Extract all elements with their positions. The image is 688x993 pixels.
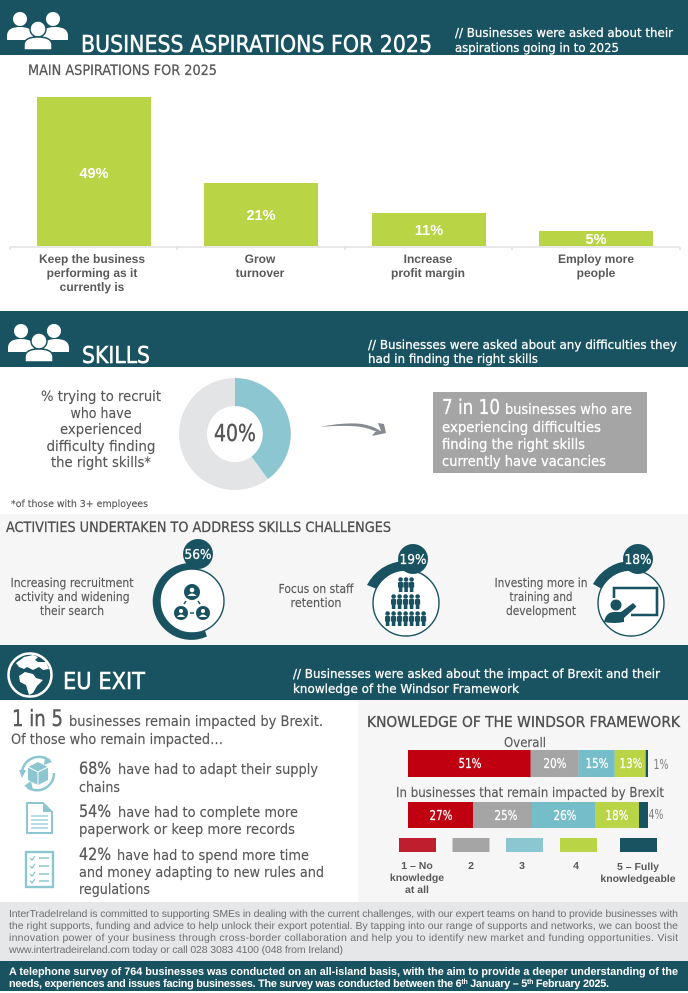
panel: EU exit header (0, 645, 688, 700)
panel: survey method: th (527, 979, 533, 986)
activity: retention 19% (278, 544, 439, 636)
bar chart: main aspirations: Grow (245, 252, 276, 266)
legend: 4 (573, 860, 579, 872)
legend: 5 – Fully (617, 861, 659, 873)
text: recruiting difficulty: % trying to recruit (41, 389, 161, 405)
icon: globe (8, 654, 52, 696)
bar chart: main aspirations: currently is (60, 280, 125, 294)
bar chart: main aspirations: 49% (79, 166, 109, 182)
stacked bar: overall: 20% (544, 757, 566, 772)
panel: business aspirations header (0, 0, 688, 58)
text: 68%: have had to adapt their supply (118, 762, 318, 778)
panel: about InterTradeIreland: InterTradeIreland is committed to supporting SMEs in dealing with the current challenges, with our expert teams on hand to provide businesses with (9, 908, 678, 920)
panel: survey method: A telephone survey of 764 businesses was conducted on an all-island basis, with the aim to provide a deeper understanding of the (9, 966, 678, 978)
text: 54% (79, 802, 298, 838)
text: 42%: have had to spend more time (117, 848, 309, 864)
activity: retention 19%: Focus on staff (278, 582, 354, 596)
legend: 1 – No (401, 860, 433, 872)
icon: document (27, 803, 52, 833)
legend: knowledge (390, 872, 444, 884)
text: recruiting difficulty: who have (70, 406, 132, 422)
icon: checklist (26, 852, 53, 887)
header note: aspirations going in to 2025 (455, 40, 619, 55)
bar chart: main aspirations (10, 97, 680, 294)
panel: Windsor Framework knowledge (358, 700, 688, 902)
panel: survey method: January – 5 (468, 978, 527, 990)
text: 42% (79, 845, 324, 898)
icon: people group (7, 12, 68, 50)
panel: about InterTradeIreland: www.intertradeireland.com today or call 028 3083 4100 (048 from Ireland) (8, 944, 343, 956)
bar chart: main aspirations: Keep the business (39, 252, 145, 266)
icon: pyramid of staff (385, 577, 426, 626)
bar chart: main aspirations: profit margin (391, 266, 465, 280)
callout: 7 in 10: experiencing difficulties (442, 420, 601, 436)
callout: 7 in 10: 7 in 10 (442, 395, 500, 419)
text: 54%: paperwork or keep more records (79, 822, 295, 838)
text: 42%: and money adapting to new rules and (79, 865, 324, 881)
bar chart: main aspirations: 11% (415, 223, 443, 239)
callout: 7 in 10: businesses who are (505, 402, 632, 418)
bar chart: main aspirations: Increase (404, 252, 453, 266)
activity: training 18%: Investing more in (494, 576, 588, 590)
text: 42%: 42% (79, 845, 111, 865)
panel: survey method: needs, experiences and issues facing businesses. The survey was conducted between the 6 (9, 978, 462, 990)
section title: SKILLS (82, 343, 150, 369)
icon: people group (8, 324, 69, 362)
legend: knowledgeable (600, 873, 676, 885)
donut chart: 40% (193, 378, 291, 479)
stacked bar: overall (408, 750, 668, 777)
section title: EU EXIT (63, 669, 146, 695)
legend (390, 838, 676, 896)
header note (455, 25, 674, 55)
activity: recruitment 56%: Increasing recruitment (10, 576, 134, 590)
panel: about InterTradeIreland: innovation power of your business through cross-border collaboration and help you to identify new market and funding opportunities. Visit (9, 932, 678, 944)
callout: 7 in 10: currently have vacancies (442, 454, 606, 470)
icon: network of people (174, 584, 210, 620)
activity: training 18%: training and (510, 590, 572, 604)
bar chart: main aspirations: performing as it (47, 266, 137, 280)
panel: about InterTradeIreland: the right supports, funding and advice to help unlock their export potential. By tapping into our range of supports and networks, we can boost the (9, 920, 678, 932)
bar chart: main aspirations: people (577, 266, 616, 280)
label: overall: Overall (504, 736, 546, 751)
text: 54%: 54% (79, 802, 111, 822)
text: 42%: regulations (79, 882, 150, 898)
legend: 3 (519, 860, 525, 872)
activity: retention 19%: 19% (400, 553, 426, 568)
text: 1 in 5: businesses remain impacted by Brexit. (69, 714, 323, 730)
header note: had in finding the right skills (368, 351, 538, 366)
icon: supply chain box (19, 756, 54, 790)
panel: survey method: February 2025. (533, 978, 609, 990)
panel: skills header (0, 311, 688, 369)
text: recruiting difficulty: difficulty finding (46, 439, 156, 455)
header note: // Businesses were asked about the impact of Brexit and their (293, 666, 661, 681)
text: 68%: 68% (79, 759, 111, 779)
panel: about InterTradeIreland (0, 902, 688, 961)
icon: presenter at board (604, 588, 657, 623)
stacked bar: overall: 51% (458, 757, 482, 772)
text: 1 in 5 (11, 707, 323, 748)
label: impacted businesses: In businesses that remain impacted by Brexit (396, 786, 664, 801)
stacked bar: impacted businesses: 25% (494, 809, 518, 824)
arrow (320, 423, 386, 436)
stacked bar: overall: 15% (586, 757, 608, 772)
bar chart: main aspirations: Employ more (558, 252, 634, 266)
activity: training 18%: 18% (624, 553, 652, 568)
stacked bar: overall: 13% (620, 757, 642, 772)
header note (293, 666, 661, 696)
legend: 2 (468, 860, 474, 872)
activity: recruitment 56%: their search (40, 604, 104, 618)
activity: retention 19%: retention (290, 596, 342, 610)
panel: activities (0, 514, 688, 645)
stacked bar: impacted businesses: 4% (648, 808, 664, 823)
text: 68% (79, 759, 318, 796)
bar chart: main aspirations: turnover (236, 266, 285, 280)
text: recruiting difficulty (41, 389, 161, 471)
stacked bar: impacted businesses: 27% (430, 809, 452, 824)
activity: training 18% (494, 544, 664, 636)
panel: survey method (0, 961, 688, 991)
donut chart: 40%: 40% (214, 421, 256, 447)
panel: survey method: th (461, 979, 468, 986)
stacked bar: impacted businesses (408, 802, 664, 828)
header note: // Businesses were asked about any difficulties they (368, 337, 678, 352)
header note: knowledge of the Windsor Framework (293, 681, 520, 696)
stacked bar: impacted businesses: 18% (606, 809, 628, 824)
callout: 7 in 10 (433, 392, 647, 473)
activity: recruitment 56% (10, 539, 224, 640)
text: 54%: have had to complete more (118, 805, 298, 821)
legend: at all (405, 884, 429, 896)
header note (368, 337, 678, 366)
footnote: *of those with 3+ employees (11, 499, 148, 510)
callout: 7 in 10: finding the right skills (442, 437, 585, 453)
bar chart: main aspirations: 5% (586, 232, 607, 248)
heading: main aspirations: MAIN ASPIRATIONS FOR 2025 (28, 63, 217, 79)
heading: activities: ACTIVITIES UNDERTAKEN TO ADDRESS SKILLS CHALLENGES (6, 520, 391, 536)
text: 1 in 5: 1 in 5 (12, 707, 63, 732)
text: 68%: chains (79, 780, 120, 796)
text: recruiting difficulty: experienced (60, 422, 142, 438)
text: 1 in 5: Of those who remain impacted… (11, 732, 223, 748)
title: BUSINESS ASPIRATIONS FOR 2025 (81, 32, 432, 58)
stacked bar: impacted businesses: 26% (554, 809, 576, 824)
header note: // Businesses were asked about their (455, 25, 674, 40)
activity: recruitment 56%: activity and widening (14, 590, 130, 604)
bar chart: main aspirations: 21% (246, 208, 276, 224)
text: recruiting difficulty: the right skills* (51, 455, 151, 471)
activity: recruitment 56%: 56% (184, 548, 212, 563)
activity: training 18%: development (506, 604, 576, 618)
stacked bar: overall: 1% (654, 758, 668, 773)
